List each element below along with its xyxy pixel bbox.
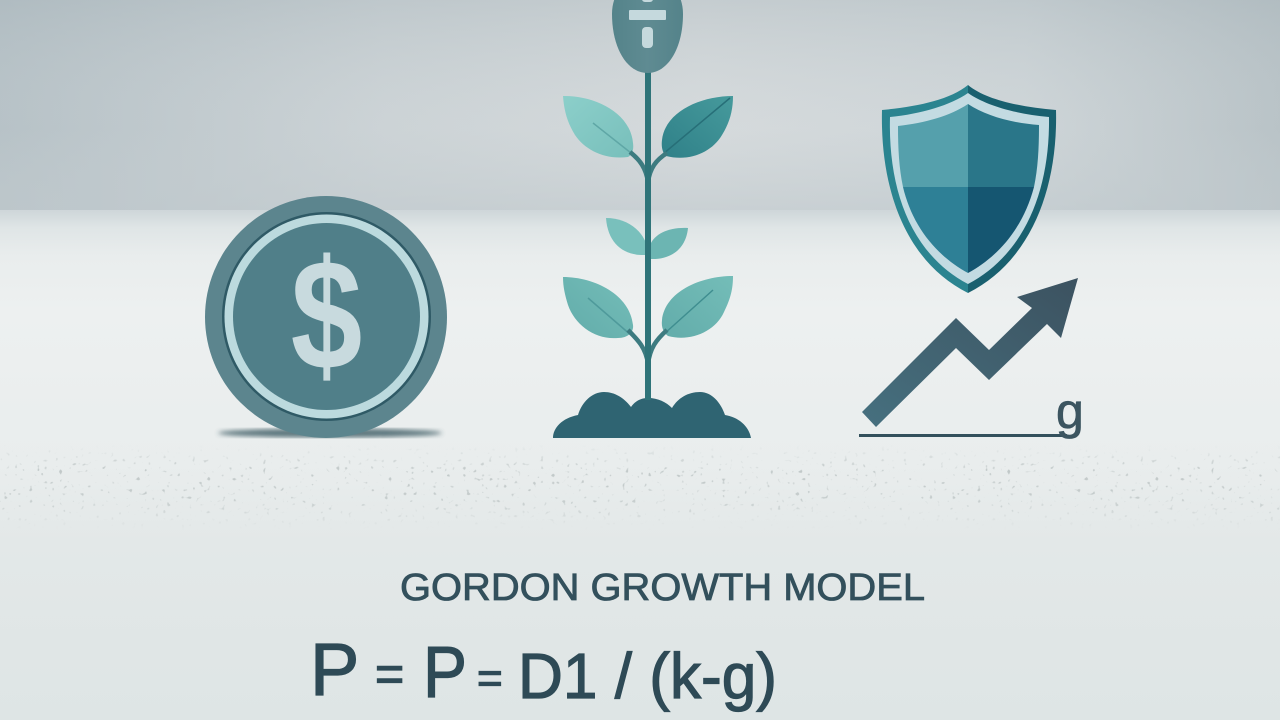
icon: growing plant [553, 0, 751, 438]
coin body [205, 196, 447, 438]
upper left leaf [563, 96, 633, 158]
lower left leaf [563, 277, 633, 338]
soil mound [553, 392, 751, 438]
formula [310, 628, 777, 713]
formula: P [310, 628, 359, 711]
background wall [0, 0, 1280, 214]
dollar sign: $ [291, 228, 362, 403]
lower right leaf [662, 276, 733, 338]
branches [628, 152, 667, 364]
icon: shield [882, 85, 1056, 293]
formula: D1 / (k-g) [518, 640, 777, 712]
rising arrow [862, 278, 1078, 427]
formula: P [423, 633, 467, 713]
middle left leaf [606, 218, 646, 255]
stem [645, 70, 651, 400]
shield light band [890, 93, 1049, 284]
coin shadow [218, 428, 442, 438]
icon: dollar coin [205, 196, 447, 438]
middle right leaf [650, 228, 688, 259]
icon: growth arrow chart [859, 278, 1084, 439]
formula: = [477, 654, 503, 703]
title: GORDON GROWTH MODEL [400, 567, 925, 609]
bud with division sign [612, 0, 683, 73]
g label: g [1056, 383, 1084, 439]
axis line [859, 434, 1067, 437]
shield border [882, 85, 968, 293]
shield quadrants [898, 104, 968, 187]
background floor with speckled band [0, 210, 1280, 522]
formula: = [375, 646, 404, 702]
upper right leaf [662, 96, 733, 158]
